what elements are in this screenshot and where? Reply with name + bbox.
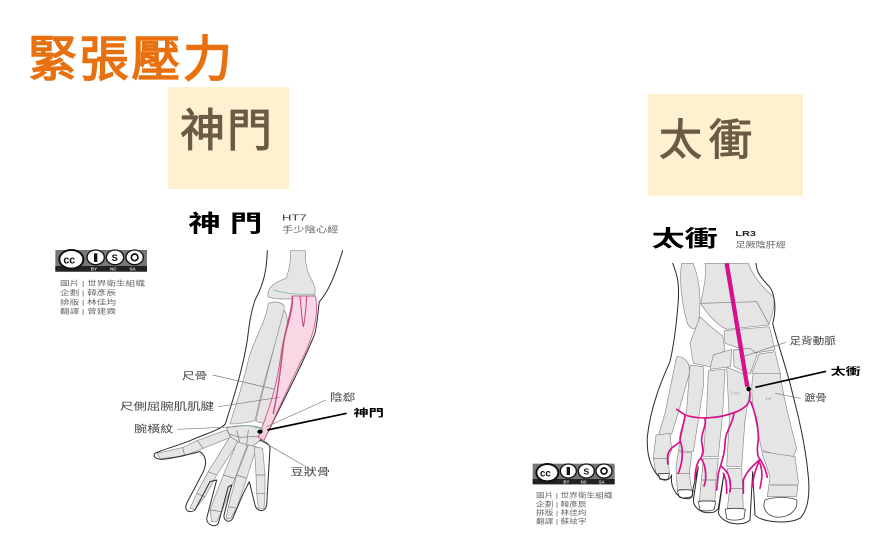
heading: 神門 HT7: 神 門 xyxy=(188,211,262,237)
heading: 太衝 LR3: 太衝 xyxy=(652,226,718,252)
heading: 太衝 LR3: 足厥陰肝經 xyxy=(735,240,786,250)
credits: 企劃 | 韓彥辰 xyxy=(60,288,116,297)
toenails xyxy=(658,473,669,479)
thumb bones xyxy=(157,430,231,459)
dorsalis pedis artery xyxy=(727,263,747,387)
anatomy labels and leaders xyxy=(120,370,384,479)
anatomy labels and leaders: 尺側屈腕肌肌腱 xyxy=(120,400,214,413)
licence badge: S xyxy=(583,466,589,476)
credits: 圖片 | 世界衛生組織 xyxy=(536,490,613,499)
licence badge: cc xyxy=(63,254,75,266)
licence badge xyxy=(55,250,147,272)
acupoint marker xyxy=(746,387,751,391)
heading: 神門 HT7 xyxy=(188,211,339,237)
anatomy labels and leaders: 尺骨 xyxy=(182,370,207,382)
credits: 企劃 | 韓彥辰 xyxy=(536,499,587,508)
anatomy labels and leaders: 豆狀骨 xyxy=(291,466,330,479)
credits: 翻譯 | 蘇絃宇 xyxy=(536,517,587,526)
licence badge: SA xyxy=(599,479,606,484)
licence badge: BY xyxy=(91,267,98,272)
upper bones xyxy=(681,263,700,329)
licence badge xyxy=(533,464,615,484)
credits xyxy=(536,490,613,526)
label card: 神門 xyxy=(168,87,289,189)
carpal bones xyxy=(227,425,265,447)
metatarsals xyxy=(658,357,689,436)
phalanges xyxy=(653,433,672,473)
anatomy labels and leaders: 足背動脈 xyxy=(789,335,836,348)
licence badge: SA xyxy=(129,267,136,272)
heading: 太衝 LR3 xyxy=(652,226,786,252)
foot illustration xyxy=(647,263,809,524)
acupoint marker xyxy=(257,430,263,434)
label card: 太衝 xyxy=(648,94,803,196)
humerus xyxy=(268,251,315,299)
heading: 神門 HT7: 手少陰心經 xyxy=(282,224,339,234)
radius xyxy=(256,310,287,423)
credits: 圖片 | 世界衛生組織 xyxy=(60,279,145,288)
licence badge: BY xyxy=(563,479,569,484)
anatomy labels and leaders: 2nd xyxy=(731,390,739,396)
credits: 翻譯 | 曾建霖 xyxy=(60,307,116,316)
panel: LR3 foot diagram xyxy=(533,226,862,526)
panel: HT7 wrist diagram xyxy=(55,211,384,526)
metacarpal and phalanges xyxy=(190,437,238,509)
title: 緊張壓力 xyxy=(28,33,232,87)
anatomy labels and leaders: 腕橫紋 xyxy=(134,422,173,435)
arterial branches xyxy=(677,388,750,418)
body outline xyxy=(154,251,343,526)
anatomy labels and leaders: 神門 xyxy=(353,407,384,420)
anatomy labels and leaders: 太衝 xyxy=(831,365,862,378)
heading: 神門 HT7: HT7 xyxy=(282,214,308,223)
credits: 排版 | 林佳均 xyxy=(60,297,116,306)
muscle xyxy=(258,296,317,441)
licence badge: NC xyxy=(581,479,587,484)
label card: 太衝: 太衝 xyxy=(659,117,752,165)
anatomy labels and leaders xyxy=(731,335,862,404)
licence badge: cc xyxy=(540,468,551,479)
anatomy labels and leaders: 蹠骨 xyxy=(805,391,827,404)
label card: 神門: 神門 xyxy=(180,105,272,156)
credits xyxy=(60,279,145,316)
credits: 排版 | 林佳均 xyxy=(536,508,587,517)
hand and forearm illustration xyxy=(154,251,343,526)
licence badge: S xyxy=(112,253,118,263)
anatomy labels and leaders: 陰郄 xyxy=(330,391,355,404)
licence badge: NC xyxy=(110,267,117,272)
body outline xyxy=(647,263,809,524)
ulna xyxy=(230,302,284,424)
heading: 太衝 LR3: LR3 xyxy=(735,229,756,238)
anatomy labels and leaders: 1st xyxy=(765,396,772,402)
